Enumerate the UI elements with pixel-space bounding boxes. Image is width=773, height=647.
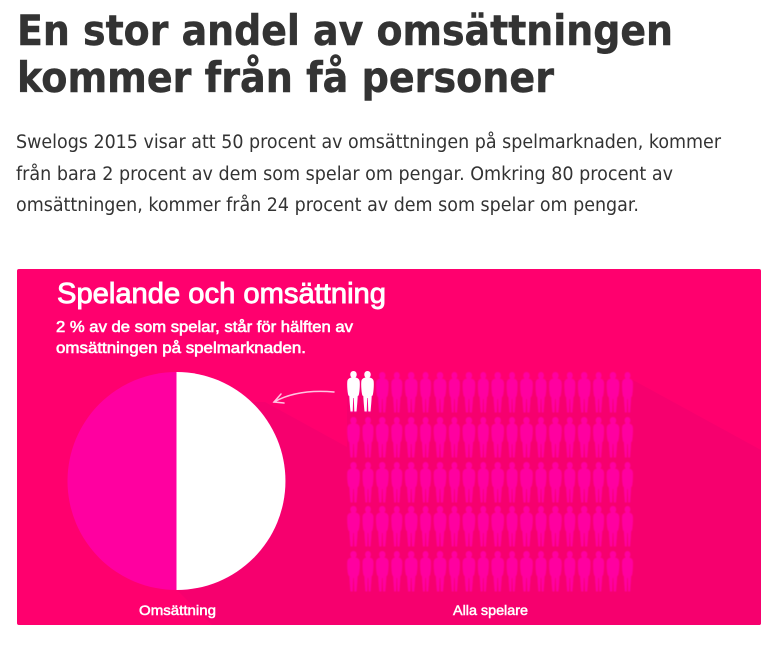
card subheading xyxy=(56,319,353,357)
pie chart xyxy=(68,372,286,590)
label: revenue: Omsättning xyxy=(139,602,216,618)
panel: infographic card xyxy=(17,269,761,625)
label: all players: Alla spelare xyxy=(453,602,528,618)
card background xyxy=(17,269,761,625)
title: En stor andel av omsättningen xyxy=(17,6,673,55)
long shadow xyxy=(177,380,761,625)
card subheading: omsättningen på spelmarknaden. xyxy=(56,340,306,357)
intro text xyxy=(16,132,721,216)
title: kommer från få personer xyxy=(17,53,554,102)
intro text: från bara 2 procent av dem som spelar om pengar. Omkring 80 procent av xyxy=(16,164,673,185)
people grid xyxy=(347,372,633,592)
title xyxy=(17,6,673,102)
intro text: Swelogs 2015 visar att 50 procent av omsättningen på spelmarknaden, kommer xyxy=(16,132,721,153)
intro text: omsättningen, kommer från 24 procent av dem som spelar om pengar. xyxy=(16,195,639,216)
card subheading: 2 % av de som spelar, står för hälften av xyxy=(56,319,353,336)
icon: highlighted people xyxy=(347,371,374,412)
icon: arrow xyxy=(274,391,334,403)
card heading: Spelande och omsättning xyxy=(57,278,386,310)
